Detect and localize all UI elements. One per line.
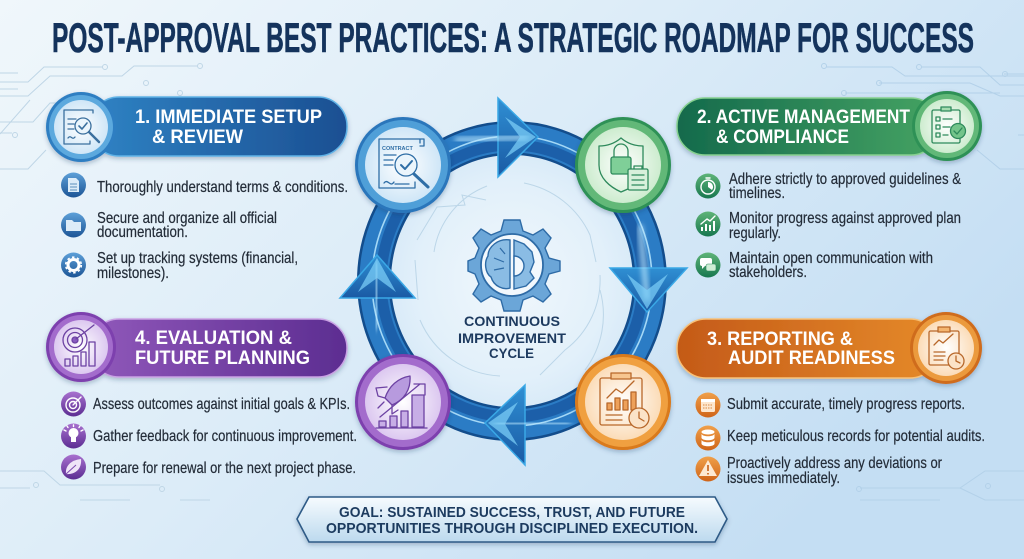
- bullet: tracking: milestones).: [97, 265, 169, 282]
- bullet: tracking: [61, 250, 298, 282]
- node: shield: [575, 117, 671, 213]
- header pill 4: 4. EVALUATION &: [135, 327, 292, 349]
- header pill 1: & REVIEW: [152, 126, 244, 148]
- centre label: [458, 313, 566, 361]
- header pill 3: [677, 312, 982, 384]
- bullet: feedback: [61, 424, 357, 448]
- bullet: guidelines: timelines.: [729, 185, 785, 202]
- node: contract review: CONTRACT: [382, 146, 413, 152]
- bullet: guidelines: [696, 171, 961, 202]
- bullet: documentation: Secure and organize all official: [97, 210, 277, 227]
- bullet: communication: [696, 250, 933, 281]
- arrow: right: [610, 225, 687, 312]
- bullet: reports: Submit accurate, timely progress reports.: [727, 396, 965, 413]
- bullet: assess: Assess outcomes against initial goals & KPIs.: [93, 396, 350, 413]
- bullet: deviations: [696, 455, 943, 487]
- arrow: left: [340, 255, 415, 330]
- header pill 4: FUTURE PLANNING: [135, 347, 310, 369]
- panel: immediate setup and review: [46, 92, 348, 282]
- decorative centre rings: [415, 183, 603, 376]
- bullet: communication: stakeholders.: [729, 264, 807, 281]
- node: report: [575, 354, 671, 450]
- bullet: terms: [61, 172, 348, 198]
- bullet: reports: [696, 392, 965, 418]
- goal banner: [297, 497, 727, 542]
- node: contract review: [355, 117, 451, 213]
- goal banner: OPPORTUNITIES THROUGH DISCIPLINED EXECUTION.: [326, 520, 698, 537]
- icon: brain gear: [468, 220, 560, 311]
- centre label: IMPROVEMENT: [458, 330, 566, 346]
- panel: active management and compliance: [677, 91, 982, 281]
- arrow: bottom: [485, 385, 570, 465]
- header pill 2: & COMPLIANCE: [716, 126, 849, 148]
- bullet: monitor: regularly.: [729, 225, 781, 242]
- bullet: deviations: issues immediately.: [727, 470, 840, 487]
- centre label: CONTINUOUS: [464, 313, 560, 329]
- bullet: communication: Maintain open communication with: [729, 250, 933, 267]
- bullet: terms: Thoroughly understand terms & conditions.: [97, 179, 348, 196]
- bullet: guidelines: Adhere strictly to approved guidelines &: [729, 171, 961, 188]
- arrow: top: [455, 98, 538, 177]
- header pill 4: [46, 312, 347, 382]
- bullet: records: [696, 426, 985, 450]
- bullet: monitor: [696, 210, 961, 242]
- header pill 1: 1. IMMEDIATE SETUP: [135, 106, 322, 128]
- header pill 3: 3. REPORTING &: [707, 328, 853, 350]
- panel: reporting and audit readiness: [677, 312, 985, 487]
- bullet: renewal: Prepare for renewal or the next project phase.: [93, 460, 356, 477]
- ring band: [372, 136, 652, 426]
- header pill 2: [677, 91, 982, 161]
- cycle diagram: [340, 98, 687, 465]
- goal banner: GOAL: SUSTAINED SUCCESS, TRUST, AND FUTURE: [339, 504, 685, 521]
- centre label: CYCLE: [489, 345, 534, 361]
- panel: evaluation and future planning: [46, 312, 357, 480]
- bullet: feedback: Gather feedback for continuous improvement.: [93, 428, 357, 445]
- bullet: monitor: Monitor progress against approved plan: [729, 210, 961, 227]
- bullet: documentation: [61, 210, 277, 241]
- header pill 3: AUDIT READINESS: [728, 347, 895, 369]
- bullet: renewal: [61, 454, 356, 480]
- header pill 1: [46, 92, 347, 162]
- bullet: assess: [61, 392, 350, 416]
- node: rocket: [355, 354, 451, 450]
- bullet: deviations: Proactively address any deviations or: [727, 455, 943, 472]
- header pill 2: 2. ACTIVE MANAGEMENT: [697, 106, 910, 128]
- bullet: documentation: documentation.: [97, 224, 188, 241]
- bullet: tracking: Set up tracking systems (financial,: [97, 250, 298, 267]
